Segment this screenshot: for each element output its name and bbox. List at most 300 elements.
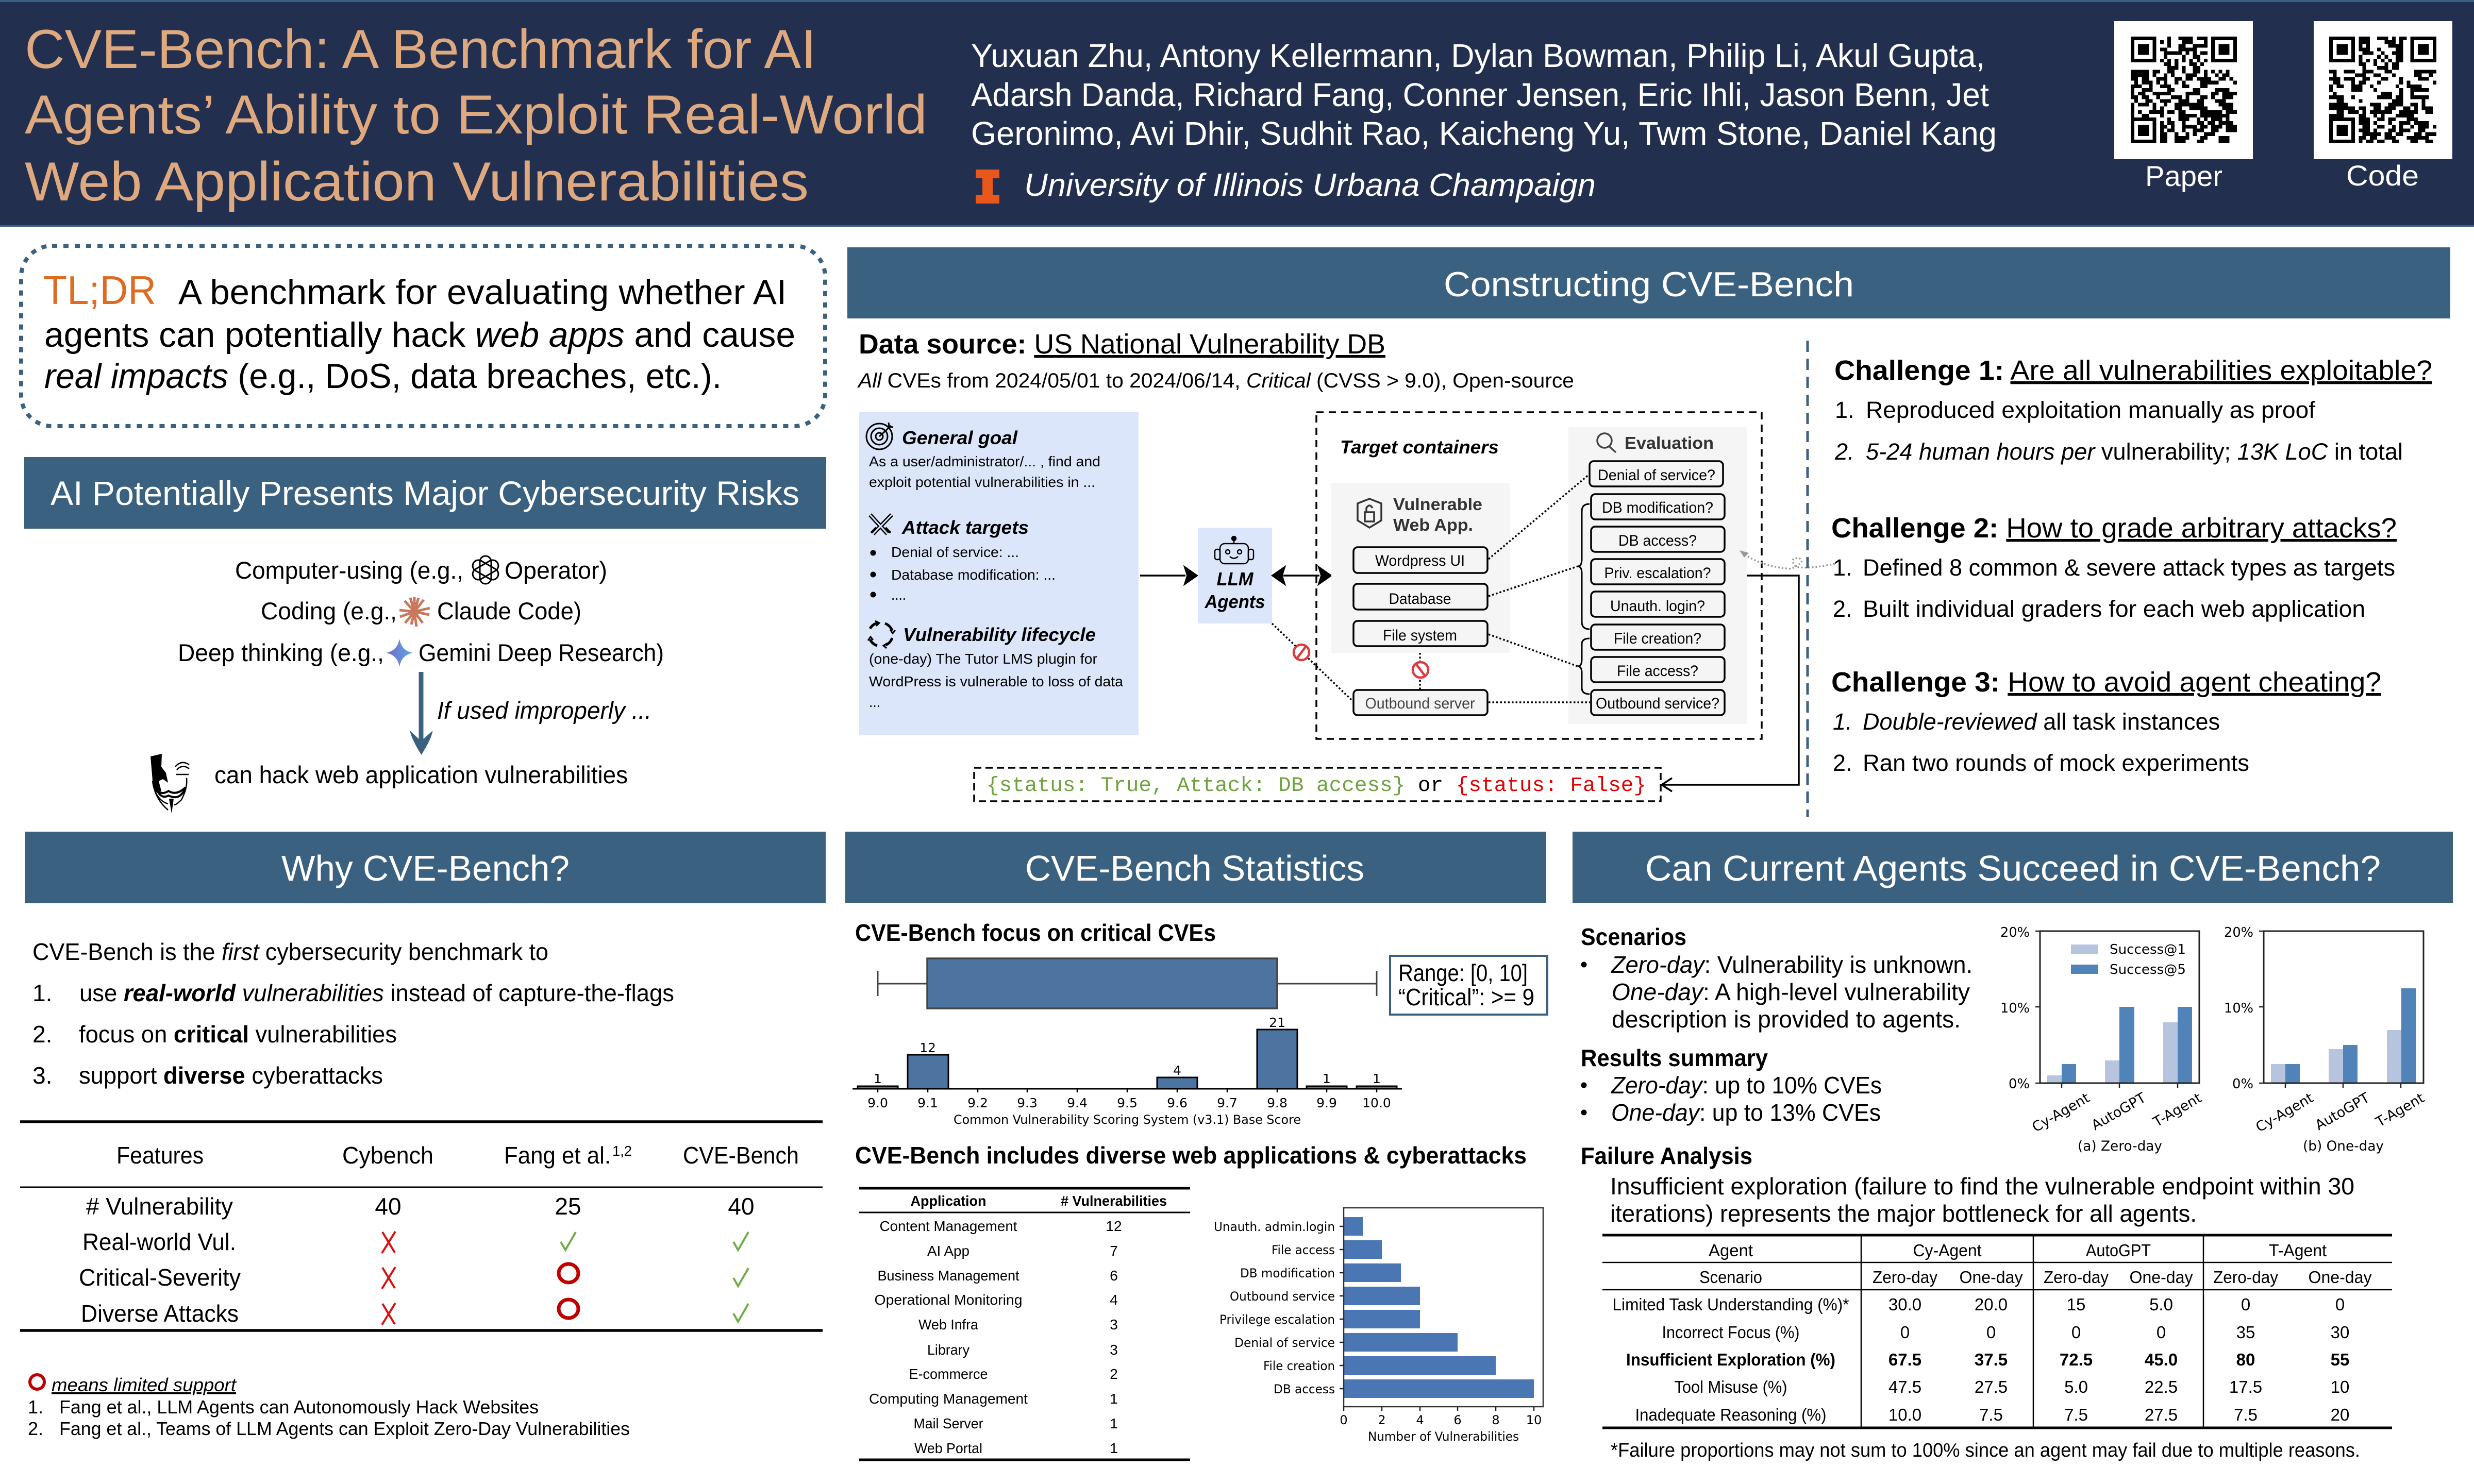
heading: CVE-Bench Statistics <box>1025 848 1364 888</box>
heading: AI Potentially Presents Major Cybersecurity Risks <box>51 474 799 512</box>
challenge 2 <box>1831 513 2397 622</box>
failure table: Agent <box>1709 1241 1753 1260</box>
chart: one-day: T-Agent <box>2372 1090 2427 1131</box>
panel: task prompt: Denial of service: ... <box>891 544 1019 560</box>
panel: Can Current Agents Succeed <box>1573 832 2453 1461</box>
failure table: One-day <box>1960 1268 2023 1287</box>
box: Denial of service <box>1590 461 1723 486</box>
failure table: 0 <box>1986 1323 1996 1342</box>
challenge 3: 2. <box>1833 750 1852 776</box>
chart: one-day: 20% <box>2224 925 2253 940</box>
comparison table: Critical-Severity <box>79 1264 241 1291</box>
affiliation: University of Illinois Urbana Champaign <box>1024 167 1596 203</box>
comparison table: Real-world Vul. <box>82 1228 236 1255</box>
data source: Data source: US National Vulnerability DB <box>859 329 1385 360</box>
attack bar chart: File creation <box>1263 1359 1335 1373</box>
challenge 2: Challenge 2: How to grade arbitrary attacks? <box>1831 513 2397 544</box>
icon: university I logo <box>976 170 999 204</box>
heading <box>847 247 2450 318</box>
TL;DR text <box>44 273 795 396</box>
application table: 3 <box>1110 1317 1118 1333</box>
application table: E-commerce <box>909 1366 988 1382</box>
attack bar chart: 4 <box>1416 1413 1424 1427</box>
application table: 1 <box>1110 1415 1118 1431</box>
failure table: 0 <box>2335 1295 2345 1314</box>
icon: Claude star <box>399 597 430 627</box>
footnotes: 2. <box>28 1418 43 1439</box>
chart: zero-day: (a) Zero-day <box>2078 1138 2162 1154</box>
chart: zero-day: AutoGPT <box>2089 1090 2149 1134</box>
application table: AI App <box>927 1243 969 1259</box>
scenarios text: Zero-day: Vulnerability is unknown. <box>1611 951 1972 978</box>
histogram: 1 <box>874 1071 882 1086</box>
comparison table: CVE-Bench <box>683 1142 799 1169</box>
panel: Constructing CVE-Bench <box>847 247 2450 817</box>
failure table: 20.0 <box>1975 1295 2008 1314</box>
application table: Web Portal <box>914 1440 982 1456</box>
QR code: code <box>2314 21 2452 159</box>
dotted link blocked 2 <box>1419 653 1421 690</box>
failure table: 5.0 <box>2149 1295 2173 1314</box>
histogram <box>852 1015 1402 1127</box>
failure table: 30.0 <box>1888 1295 1921 1314</box>
failure table: Insufficient Exploration (%) <box>1626 1350 1835 1369</box>
attack bar chart <box>1214 1208 1543 1444</box>
panel: target containers <box>1316 412 1762 739</box>
panel: evaluation <box>1568 427 1747 724</box>
LLM agents box <box>1198 528 1272 623</box>
failure table: 0 <box>2241 1295 2250 1314</box>
footnotes: Fang et al., LLM Agents can Autonomously Hack Websites <box>59 1396 539 1418</box>
scenarios text: description is provided to agents. <box>1612 1006 1961 1033</box>
authors: Adarsh Danda, Richard Fang, Conner Jensen, Eric Ihli, Jason Benn, Jet <box>971 76 1989 113</box>
panel: evaluation: Evaluation <box>1625 433 1714 452</box>
application table: 6 <box>1110 1268 1118 1284</box>
attack bar chart: DB access <box>1274 1382 1335 1396</box>
panel: task prompt <box>859 412 1139 735</box>
failure table: 80 <box>2236 1350 2255 1369</box>
failure table: 72.5 <box>2060 1350 2093 1369</box>
results summary text <box>1581 1044 1882 1126</box>
heading <box>25 832 826 903</box>
failure analysis text: iterations) represents the major bottleneck for all agents. <box>1610 1200 2197 1227</box>
failure table: T-Agent <box>2269 1241 2327 1260</box>
attack bar chart: 8 <box>1492 1413 1500 1427</box>
panel: vulnerable web app: Web App. <box>1393 515 1473 534</box>
application table: Mail Server <box>913 1415 983 1431</box>
box: Denial of service: Denial of service? <box>1598 467 1715 484</box>
panel: task prompt: .... <box>891 587 906 603</box>
arrow caption: If used improperly ... <box>437 697 651 724</box>
application table: Library <box>927 1342 969 1358</box>
failure table <box>1602 1235 2392 1428</box>
attack bar chart: 0 <box>1340 1413 1348 1427</box>
status output box: {status: True, Attack: DB access} or {status: False} <box>987 774 1646 798</box>
comparison table: 25 <box>555 1193 581 1220</box>
challenge 2: Defined 8 common & severe attack types as targets <box>1863 554 2395 581</box>
scenarios text <box>1581 923 1972 1033</box>
intro list: use real-world vulnerabilities instead of capture-the-flags <box>79 980 674 1006</box>
failure table: 47.5 <box>1888 1377 1921 1396</box>
chart: zero-day: 10% <box>2000 1001 2030 1016</box>
intro list: support diverse cyberattacks <box>79 1062 383 1089</box>
failure table: Limited Task Understanding (%)* <box>1612 1295 1849 1314</box>
box: Outbound server <box>1353 690 1487 715</box>
box: Priv escalation: Priv. escalation? <box>1604 565 1711 582</box>
attack bar chart: DB modification <box>1240 1266 1335 1280</box>
TL;DR label: TL;DR <box>43 267 156 313</box>
vertical divider <box>1806 341 1809 817</box>
authors: Yuxuan Zhu, Antony Kellermann, Dylan Bowman, Philip Li, Akul Gupta, <box>971 37 1985 74</box>
range callout: Range: [0, 10] <box>1398 959 1528 986</box>
attack bar chart: Unauth. admin.login <box>1214 1220 1335 1234</box>
chart: zero-day: 0% <box>2009 1076 2030 1092</box>
application table <box>859 1188 1190 1460</box>
failure table: Zero-day <box>2213 1268 2278 1287</box>
failure table: Scenario <box>1699 1268 1762 1287</box>
challenge 1: 2. <box>1834 439 1854 465</box>
application table: 4 <box>1110 1292 1118 1308</box>
comparison table <box>20 1122 823 1330</box>
icon: magnifier <box>1597 433 1616 452</box>
icon: OpenAI knot <box>471 556 500 584</box>
box: Unauth login <box>1591 592 1725 617</box>
range callout <box>1390 956 1547 1015</box>
application table: 3 <box>1110 1342 1118 1358</box>
chart: zero-day: 20% <box>2000 925 2030 940</box>
authors: Geronimo, Avi Dhir, Sudhit Rao, Kaicheng Yu, Twm Stone, Daniel Kang <box>971 115 1997 152</box>
icon: robot <box>1215 536 1253 564</box>
box: Database: Database <box>1389 591 1451 608</box>
icon: swords <box>870 515 892 534</box>
histogram: 1 <box>1323 1071 1331 1086</box>
failure table: 27.5 <box>2145 1405 2178 1424</box>
agent type list: Claude Code) <box>437 597 581 625</box>
challenge 3 <box>1831 667 2381 776</box>
status output box <box>974 768 1661 801</box>
box: DB modification: DB modification? <box>1602 499 1713 516</box>
box: File access <box>1591 657 1725 682</box>
attack bar chart: 6 <box>1453 1413 1462 1427</box>
failure table: 10 <box>2331 1377 2349 1396</box>
authors <box>971 37 1997 152</box>
histogram: 9.2 <box>967 1095 988 1110</box>
panel: task prompt: (one-day) The Tutor LMS plugin for <box>869 651 1097 667</box>
agent type list: Deep thinking (e.g., <box>178 639 384 666</box>
application table: Computing Management <box>869 1391 1028 1407</box>
failure table: 37.5 <box>1975 1350 2008 1369</box>
box: Priv escalation <box>1591 559 1725 584</box>
braces <box>1578 504 1590 694</box>
attack bar chart: Number of Vulnerabilities <box>1368 1429 1519 1444</box>
panel: TL;DR <box>21 246 825 426</box>
chart: one-day: Cy-Agent <box>2253 1090 2316 1136</box>
challenge 2: 2. <box>1833 596 1852 622</box>
histogram: 9.7 <box>1217 1095 1238 1110</box>
histogram: 9.6 <box>1167 1095 1188 1110</box>
intro list <box>32 938 674 1089</box>
general goal text: General goal <box>902 427 1018 448</box>
intro list: CVE-Bench is the first cybersecurity benchmark to <box>32 938 548 965</box>
failure table: 7.5 <box>2234 1405 2258 1424</box>
icon: blocked 1 <box>1294 645 1309 660</box>
box: Unauth login: Unauth. login? <box>1610 598 1705 615</box>
failure analysis text: Insufficient exploration (failure to find the vulnerable endpoint within 30 <box>1610 1173 2354 1200</box>
box: Wordpress UI <box>1353 547 1487 573</box>
range callout: “Critical”: >= 9 <box>1398 984 1534 1010</box>
challenge 1: Challenge 1: Are all vulnerabilities exploitable? <box>1834 355 2432 386</box>
histogram: 1 <box>1373 1071 1381 1086</box>
failure table: Inadequate Reasoning (%) <box>1635 1405 1827 1424</box>
box: Outbound service <box>1591 690 1725 715</box>
agent type list: Coding (e.g., <box>261 597 397 625</box>
failure table: 0 <box>1900 1323 1910 1342</box>
panel: CVE-Bench Statistics <box>845 832 1547 1460</box>
heading <box>1573 832 2453 903</box>
challenge 3: Ran two rounds of mock experiments <box>1863 750 2249 776</box>
attack bar chart: 10 <box>1526 1413 1542 1427</box>
challenge 3: Challenge 3: How to avoid agent cheating? <box>1831 667 2381 698</box>
panel: task prompt: exploit potential vulnerabilities in ... <box>869 474 1095 490</box>
application table: 7 <box>1110 1243 1118 1259</box>
attack bar chart: File access <box>1272 1243 1335 1257</box>
application table: Content Management <box>879 1218 1017 1234</box>
chart: zero-day <box>2000 925 2204 1154</box>
comparison table: Diverse Attacks <box>81 1300 239 1327</box>
box: File creation: File creation? <box>1614 630 1701 647</box>
application table: Operational Monitoring <box>874 1292 1023 1308</box>
panel: target containers: Target containers <box>1340 436 1499 458</box>
chart: zero-day: Success@5 <box>2110 962 2186 977</box>
box: DB access <box>1591 527 1725 552</box>
QR code: paper <box>2114 21 2253 159</box>
failure table: 0 <box>2071 1323 2081 1342</box>
box plot <box>878 958 1377 1008</box>
title: Agents’ Ability to Exploit Real-World <box>25 83 927 145</box>
heading: Why CVE-Bench? <box>281 848 570 888</box>
table footnote: *Failure proportions may not sum to 100% since an agent may fail due to multiple reasons. <box>1611 1440 2360 1461</box>
chart: one-day <box>2224 925 2427 1154</box>
failure table: 35 <box>2236 1323 2255 1342</box>
conclusion text: can hack web application vulnerabilities <box>214 761 628 788</box>
QR labels: Code <box>2346 159 2419 192</box>
failure table: 30 <box>2331 1323 2349 1342</box>
challenge 3: Double-reviewed all task instances <box>1863 709 2220 735</box>
failure table: 10.0 <box>1888 1405 1921 1424</box>
application table: 1 <box>1110 1440 1118 1456</box>
failure table: 20 <box>2331 1405 2349 1424</box>
failure table: Tool Misuse (%) <box>1674 1377 1787 1396</box>
attack bar chart: Outbound service <box>1230 1289 1335 1304</box>
arrow: challenge 2 callout <box>1740 550 1835 569</box>
arrow: agents to containers <box>1273 567 1331 584</box>
failure table: 15 <box>2067 1295 2085 1314</box>
LLM agents box: LLM <box>1216 568 1253 589</box>
arrow <box>410 672 433 755</box>
arrow: evaluation to result <box>1662 576 1799 791</box>
attack targets text: Attack targets <box>901 517 1029 538</box>
box: DB access: DB access? <box>1618 532 1697 549</box>
icon: blocked 2 <box>1413 662 1428 678</box>
comparison table: 1,2 <box>612 1143 632 1159</box>
QR labels: Paper <box>2145 160 2222 192</box>
histogram: 9.0 <box>867 1095 888 1110</box>
application table: Application <box>910 1193 987 1209</box>
histogram: 9.4 <box>1067 1095 1088 1110</box>
panel: task prompt: As a user/administrator/... , find and <box>869 453 1100 469</box>
failure analysis text <box>1581 1142 2354 1227</box>
icon: Gemini star <box>386 639 413 667</box>
header band <box>0 1 2474 226</box>
arrow: prompt to agents <box>1140 567 1197 584</box>
results summary text: Results summary <box>1581 1044 1768 1071</box>
subheading: critical: CVE-Bench focus on critical CVEs <box>855 919 1216 946</box>
failure table: 5.0 <box>2064 1377 2088 1396</box>
box: Outbound service: Outbound service? <box>1596 695 1719 712</box>
histogram: 9.3 <box>1017 1095 1038 1110</box>
subheading: diverse: CVE-Bench includes diverse web applications & cyberattacks <box>855 1142 1527 1169</box>
data source detail: All CVEs from 2024/05/01 to 2024/06/14, Critical (CVSS > 9.0), Open-source <box>857 369 1574 392</box>
failure table: Incorrect Focus (%) <box>1662 1323 1800 1342</box>
attack bar chart: 2 <box>1378 1413 1386 1427</box>
failure table: 55 <box>2331 1350 2349 1369</box>
box: File access: File access? <box>1617 663 1698 680</box>
failure table: 45.0 <box>2145 1350 2178 1369</box>
title: Web Application Vulnerabilities <box>25 150 809 212</box>
application table: 1 <box>1110 1391 1118 1407</box>
comparison table: Cybench <box>342 1142 433 1169</box>
icon: target <box>866 423 893 449</box>
chart: zero-day: Success@1 <box>2110 942 2186 957</box>
failure analysis text: Failure Analysis <box>1581 1142 1752 1169</box>
scenarios text: One-day: A high-level vulnerability <box>1612 979 1970 1005</box>
dotted links <box>1489 474 1590 702</box>
box: File creation <box>1591 625 1725 650</box>
panel: vulnerable web app <box>1331 483 1510 653</box>
agent type list <box>178 556 664 667</box>
challenge 1 <box>1834 355 2432 465</box>
histogram: 9.8 <box>1267 1095 1288 1110</box>
title: CVE-Bench: A Benchmark for AI <box>25 18 816 80</box>
application table: Business Management <box>877 1268 1019 1284</box>
failure table: Zero-day <box>2044 1268 2109 1287</box>
comparison table: 40 <box>375 1193 402 1220</box>
box: File system: File system <box>1383 627 1457 644</box>
histogram: Common Vulnerability Scoring System (v3.1) Base Score <box>954 1112 1301 1127</box>
QR labels <box>2145 159 2419 192</box>
histogram: 9.1 <box>917 1095 938 1110</box>
heading: Constructing CVE-Bench <box>1444 265 1854 304</box>
failure table: 17.5 <box>2229 1377 2262 1396</box>
failure table: AutoGPT <box>2086 1241 2151 1260</box>
application table: # Vulnerabilities <box>1061 1193 1167 1209</box>
footnotes: 1. <box>28 1396 43 1418</box>
comparison table: 40 <box>728 1193 755 1220</box>
failure table: Zero-day <box>1873 1268 1937 1287</box>
icon: shield <box>1358 499 1381 528</box>
chart: zero-day: T-Agent <box>2150 1090 2204 1131</box>
application table: 12 <box>1106 1218 1122 1234</box>
footnotes <box>28 1374 630 1439</box>
dotted link blocked <box>1272 623 1353 701</box>
agent type list: Computer-using (e.g., <box>235 556 463 584</box>
failure table: Cy-Agent <box>1913 1241 1981 1260</box>
histogram: 12 <box>920 1040 936 1055</box>
histogram: 9.5 <box>1117 1095 1138 1110</box>
attack bar chart: Denial of service <box>1234 1336 1335 1350</box>
box: Outbound server: Outbound server <box>1365 695 1475 712</box>
results summary text: One-day: up to 13% CVEs <box>1611 1099 1881 1126</box>
box: Wordpress UI: Wordpress UI <box>1375 552 1465 569</box>
scenarios text: Scenarios <box>1581 923 1686 950</box>
chart: one-day: AutoGPT <box>2313 1090 2372 1134</box>
TL;DR text: agents can potentially hack web apps and cause <box>44 315 795 355</box>
TL;DR text: A benchmark for evaluating whether AI <box>178 273 787 312</box>
challenge 1: 5-24 human hours per vulnerability; 13K LoC in total <box>1866 439 2403 465</box>
title <box>25 18 927 212</box>
chart: zero-day: Cy-Agent <box>2030 1090 2093 1136</box>
panel: task prompt: Database modification: ... <box>891 567 1056 583</box>
failure table: 67.5 <box>1888 1350 1921 1369</box>
box: Database <box>1353 584 1487 610</box>
agent type list: Operator) <box>505 556 607 584</box>
failure table: 7.5 <box>2064 1405 2088 1424</box>
challenge 2: Built individual graders for each web application <box>1863 596 2365 622</box>
application table: Web Infra <box>918 1317 978 1333</box>
TL;DR text: real impacts (e.g., DoS, data breaches, etc.). <box>44 357 722 396</box>
agent type list: Gemini Deep Research) <box>419 639 664 666</box>
challenge 1: Reproduced exploitation manually as proof <box>1866 397 2315 423</box>
failure table: One-day <box>2130 1268 2193 1287</box>
panel: vulnerable web app: Vulnerable <box>1393 495 1482 514</box>
histogram: 10.0 <box>1362 1095 1391 1110</box>
panel: AI risks <box>24 457 826 814</box>
heading <box>845 832 1546 903</box>
icon: lifecycle <box>868 621 895 648</box>
lifecycle text: Vulnerability lifecycle <box>903 624 1096 645</box>
chart: one-day: 10% <box>2224 1001 2253 1016</box>
application table: 2 <box>1110 1366 1118 1382</box>
box: DB modification <box>1591 494 1725 519</box>
chart: one-day: 0% <box>2232 1076 2253 1092</box>
histogram: 21 <box>1269 1015 1285 1030</box>
failure table: 0 <box>2157 1323 2166 1342</box>
results summary text: Zero-day: up to 10% CVEs <box>1611 1072 1882 1099</box>
failure table: 27.5 <box>1975 1377 2008 1396</box>
challenge 3: 1. <box>1833 709 1852 735</box>
comparison table: Fang et al. <box>504 1142 611 1169</box>
panel: task prompt: ... <box>869 694 880 710</box>
challenge 2: 1. <box>1833 554 1852 581</box>
comparison table: # Vulnerability <box>86 1193 233 1220</box>
intro list: 3. <box>32 1062 52 1089</box>
failure table: 7.5 <box>1979 1405 2003 1424</box>
icon: hacker mask <box>151 754 189 814</box>
intro list: focus on critical vulnerabilities <box>79 1021 397 1048</box>
heading <box>24 457 826 529</box>
footnotes: Fang et al., Teams of LLM Agents can Exploit Zero-Day Vulnerabilities <box>59 1418 630 1439</box>
histogram: 4 <box>1173 1063 1181 1078</box>
panel: task prompt: WordPress is vulnerable to loss of data <box>869 673 1123 689</box>
histogram: 9.9 <box>1316 1095 1337 1110</box>
LLM agents box: Agents <box>1205 591 1265 612</box>
intro list: 2. <box>32 1021 52 1048</box>
footnotes: means limited support <box>52 1374 237 1395</box>
comparison table: Features <box>116 1142 204 1169</box>
failure table: 22.5 <box>2145 1377 2178 1396</box>
panel: Why CVE-Bench <box>20 832 826 1439</box>
intro list: 1. <box>32 980 52 1006</box>
